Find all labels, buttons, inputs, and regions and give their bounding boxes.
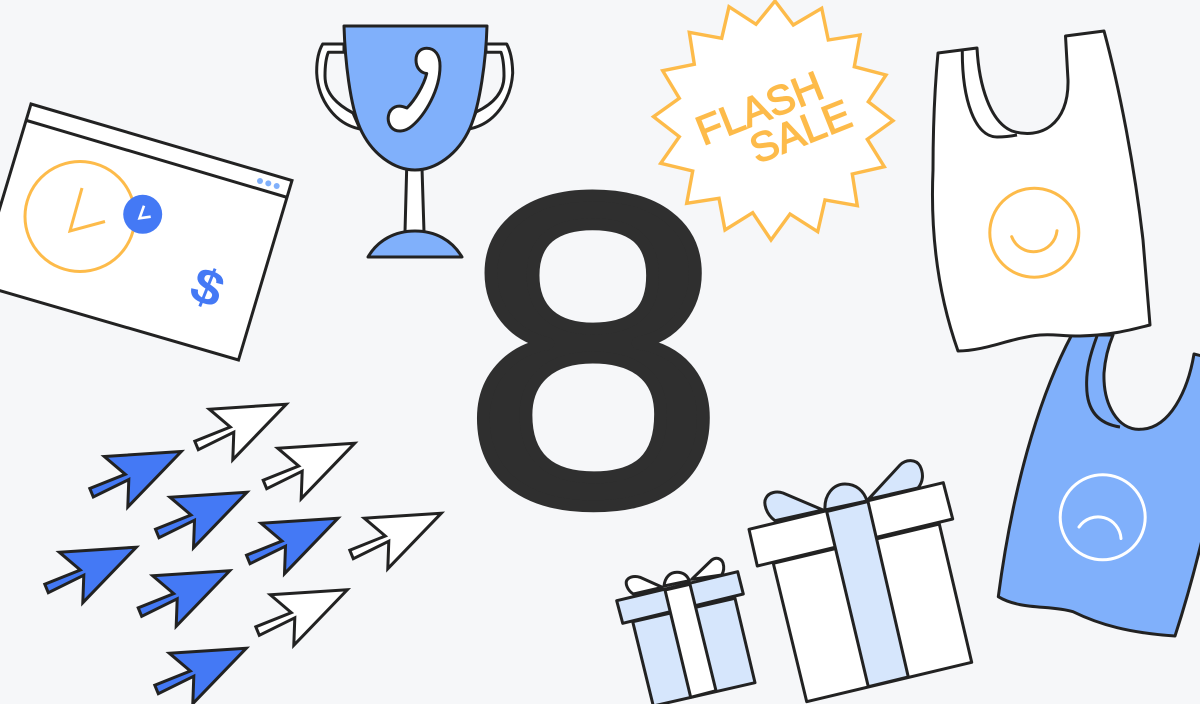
blue bag inner handle — [1087, 336, 1120, 427]
white arrow — [195, 404, 286, 460]
trophy left handle — [317, 44, 360, 129]
flash sale text — [690, 62, 858, 172]
panel: trophy with phone — [317, 26, 513, 257]
panel: small gift — [617, 558, 755, 704]
white bag inner handle — [962, 50, 1017, 137]
trophy cup — [344, 26, 487, 170]
panel: cursor arrows — [45, 404, 441, 704]
icon: large yellow clock — [25, 162, 135, 272]
starburst outline — [654, 1, 893, 240]
gift body — [773, 524, 972, 702]
window frame — [0, 104, 292, 360]
icon: small blue clock — [123, 195, 162, 234]
white arrow — [256, 590, 347, 645]
blue arrow — [138, 571, 230, 626]
window title bar line — [27, 120, 287, 198]
blue arrow — [155, 648, 246, 704]
panel: browser window — [0, 104, 292, 360]
blue arrow — [156, 492, 247, 548]
trophy right handle — [469, 44, 513, 129]
blue arrow — [246, 518, 338, 574]
blue arrow — [45, 547, 136, 603]
big number eight: 8 — [463, 106, 724, 596]
trophy base — [368, 231, 462, 257]
trophy stem — [405, 168, 424, 232]
white arrow — [263, 443, 355, 499]
small gift ribbon — [665, 584, 716, 697]
panel: blue sad bag — [998, 335, 1200, 636]
gift ribbon — [827, 502, 908, 687]
icon: smiley face — [990, 188, 1079, 277]
window control dots — [257, 178, 280, 189]
blue arrow — [90, 452, 181, 507]
icon: sad face — [1060, 475, 1145, 560]
panel: white happy bag — [932, 31, 1150, 351]
icon: phone handset — [388, 48, 440, 131]
gift bow — [765, 461, 922, 521]
blue bag body — [998, 335, 1200, 636]
icon: dollar sign: $ — [183, 256, 232, 319]
small gift body — [633, 598, 755, 704]
panel: large gift — [749, 461, 972, 702]
gift lid — [749, 483, 953, 566]
white bag body — [932, 31, 1150, 351]
flash sale text: FLASH — [690, 62, 829, 154]
small gift bow — [626, 558, 724, 594]
panel: flash sale badge — [654, 1, 893, 240]
small gift lid — [617, 572, 743, 623]
white arrow — [350, 513, 441, 569]
flash sale text: SALE — [743, 91, 858, 172]
